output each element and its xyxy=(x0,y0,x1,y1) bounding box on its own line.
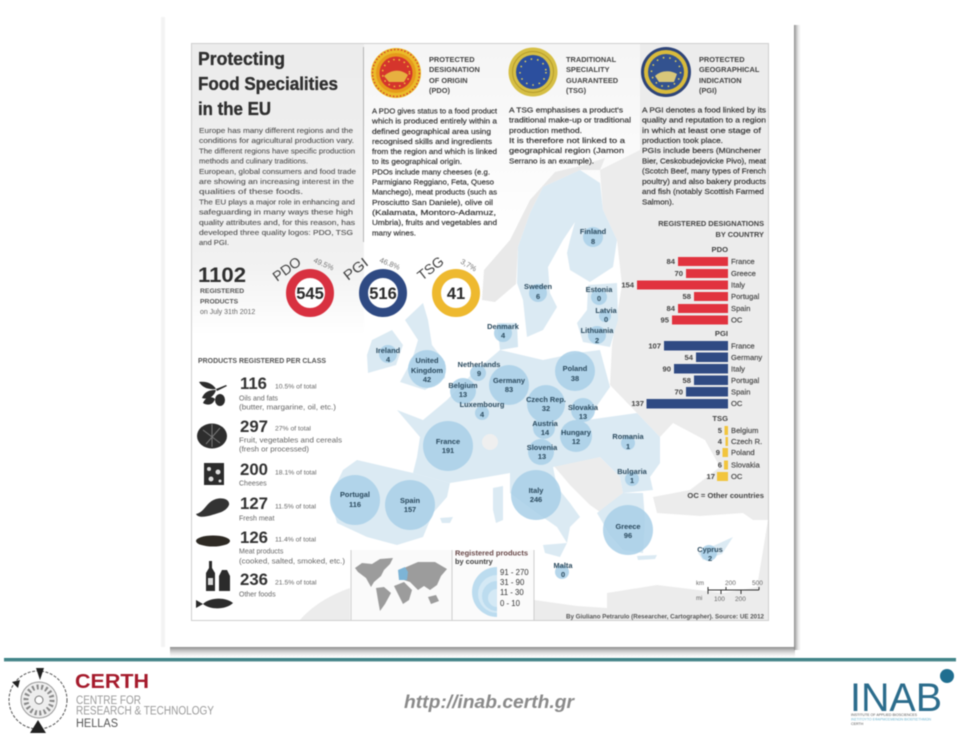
class: fruit and vegetables xyxy=(197,417,343,454)
map labels: 0 xyxy=(604,315,608,324)
panel: map background xyxy=(192,44,768,620)
bar chart: TSG: 17 xyxy=(707,472,715,481)
title xyxy=(198,49,338,119)
panel frame xyxy=(192,44,768,620)
map labels: 116 xyxy=(349,500,361,509)
icon: fruit basket xyxy=(197,424,227,448)
map labels: Belgium xyxy=(448,381,478,390)
non-EU land: Norway xyxy=(482,158,605,302)
EU land: Sweden and Finland xyxy=(517,170,617,337)
map labels: 191 xyxy=(442,446,454,455)
bar chart: PGI: Portugal xyxy=(731,376,760,385)
bar chart: TSG: Belgium xyxy=(731,426,758,435)
title: Protecting xyxy=(198,49,285,69)
bar chart: PGI: 70 xyxy=(675,388,683,396)
class: other foods: 21.5% of total xyxy=(275,580,317,586)
class: fresh meat xyxy=(196,494,317,522)
logo: CERTH emblem xyxy=(9,668,67,733)
map labels: 8 xyxy=(591,237,595,246)
class: other foods: 236 xyxy=(240,570,268,589)
donut: PGI: 46.8% xyxy=(378,256,402,272)
map labels: Czech Rep. xyxy=(526,395,566,404)
TSG text: traditional make-up or traditional xyxy=(509,116,631,124)
bar chart: TSG: TSG xyxy=(712,414,728,423)
PDO text xyxy=(371,106,498,238)
class: cheeses: 18.1% of total xyxy=(275,470,317,476)
class: cheeses: Cheeses xyxy=(239,480,267,488)
donut: TSG xyxy=(414,253,479,312)
logo: INAB: CERTH xyxy=(851,722,864,726)
heading: PDO xyxy=(429,55,480,95)
bar chart: PDO: OC xyxy=(731,316,743,324)
map labels: 4 xyxy=(501,331,506,340)
bar chart: TSG: Czech R. xyxy=(731,437,762,446)
bar chart: TSG: 9 xyxy=(716,448,720,457)
TSG text: Serrano is an example). xyxy=(509,156,594,166)
TSG text: production method. xyxy=(509,126,582,135)
class: meat products: 11.4% of total xyxy=(275,536,317,544)
donut: PGI xyxy=(340,254,402,312)
map bubbles xyxy=(330,227,717,579)
inset separators xyxy=(351,550,534,620)
CERTH wordmark: RESEARCH & TECHNOLOGY xyxy=(76,706,214,718)
CERTH wordmark: CERTH xyxy=(75,671,149,693)
logo: PDO xyxy=(371,48,421,98)
intro text xyxy=(199,126,356,247)
credit: By Giuliano Petrarulo (Researcher, Cartographer). Source: UE 2012 xyxy=(566,614,764,620)
icon: sausage xyxy=(196,536,230,546)
PDO text: Umbria), fruits and vegetables and xyxy=(372,218,497,227)
PGI text: production took place. xyxy=(642,136,723,145)
map labels: 32 xyxy=(542,404,550,413)
intro text: The EU plays a major role in enhancing and xyxy=(199,198,355,206)
map labels: 0 xyxy=(561,570,565,579)
TSG text: geographical region (Jamon xyxy=(509,146,624,155)
bar chart: TSG: Poland xyxy=(731,448,755,457)
EU land: Iberia xyxy=(330,460,450,545)
title: Food Specialities xyxy=(198,74,338,94)
total registered products xyxy=(198,264,255,316)
PDO text: Manchego), meat products (such as xyxy=(372,188,497,196)
bar chart: PDO: 84 xyxy=(667,257,676,266)
intro text: conditions for agricultural production vary. xyxy=(199,136,354,145)
PGI text: PGIs include beers (Münchener xyxy=(642,146,762,155)
intro text: qualities of these foods. xyxy=(199,187,303,196)
TSG text: A TSG emphasises a product's xyxy=(509,106,623,114)
map labels: 38 xyxy=(571,374,579,383)
icon: cheese block xyxy=(204,463,224,485)
heading: PGI xyxy=(699,55,760,95)
icon: bottles and fish xyxy=(196,561,233,608)
heading: TSG: (TSG) xyxy=(566,86,587,95)
bar chart: PDO xyxy=(621,245,760,324)
PDO text: to its geographical origin. xyxy=(372,157,462,166)
logo: INAB xyxy=(850,669,954,726)
map labels: Latvia xyxy=(595,306,618,315)
total registered products: on July 31th 2012 xyxy=(200,309,255,316)
heading: TSG xyxy=(566,55,619,95)
map labels: 12 xyxy=(572,437,580,446)
inset: legend: Registered products xyxy=(455,548,528,558)
TSG text xyxy=(509,106,631,166)
map labels: France xyxy=(436,437,460,446)
class: fruit and vegetables: (fresh or processed) xyxy=(239,446,309,454)
products per class heading: PRODUCTS REGISTERED PER CLASS xyxy=(198,356,326,365)
bar chart: PGI: 107 xyxy=(648,342,661,350)
donut: PDO: 545 xyxy=(296,285,324,303)
class: cheeses: 200 xyxy=(240,460,268,479)
map labels: Romania xyxy=(612,432,644,441)
PDO text: PDOs include many cheeses (e.g. xyxy=(372,168,490,176)
bar chart: PGI: France xyxy=(731,342,755,350)
map labels: 6 xyxy=(536,292,540,301)
map labels: 4 xyxy=(480,410,485,419)
map labels: 96 xyxy=(624,531,632,540)
map labels: 0 xyxy=(597,294,601,303)
logo: INAB: ΙΝΣΤΙΤΟΥΤΟ ΕΦΑΡΜΟΣΜΕΝΩΝ ΒΙΟΕΠΙΣΤΗΜΩΝ xyxy=(851,718,931,722)
heading: TSG: GUARANTEED xyxy=(566,76,619,85)
class: oils and fats: Oils and fats xyxy=(239,396,278,402)
class: other foods xyxy=(196,561,317,608)
map labels: 4 xyxy=(386,355,391,364)
chart heading: BY COUNTRY xyxy=(716,230,764,239)
map labels: Sweden xyxy=(524,282,552,291)
PDO text: recognised skills and ingredients xyxy=(372,137,492,146)
icon: olive branch xyxy=(199,382,227,406)
inset: legend xyxy=(452,548,534,620)
class: cheeses xyxy=(204,460,317,488)
map labels xyxy=(340,227,723,579)
PGI text: in which at least one stage of xyxy=(642,126,762,135)
top-centre tint xyxy=(364,44,644,234)
chart note: OC = Other countries xyxy=(687,491,764,500)
map labels: Cyprus xyxy=(697,545,723,554)
map labels: Spain xyxy=(400,496,421,505)
PDO text: which is produced entirely within a xyxy=(371,116,498,126)
class: meat products: Meat products xyxy=(239,548,284,556)
heading: PDO: PROTECTED xyxy=(429,55,475,64)
bar chart: PGI: 137 xyxy=(631,399,644,408)
non-EU land: Russia and east xyxy=(600,44,768,520)
bar chart: PGI: 58 xyxy=(683,376,691,385)
class: fruit and vegetables: 27% of total xyxy=(275,426,311,432)
intro text: and PGI. xyxy=(199,238,229,247)
map labels: Kingdom xyxy=(411,366,443,375)
map labels: 9 xyxy=(477,369,481,378)
EU land: Denmark xyxy=(497,323,518,350)
heading: PDO: (PDO) xyxy=(429,86,450,95)
footer rule xyxy=(4,658,956,662)
CERTH wordmark xyxy=(75,671,214,730)
bar chart: PDO: Portugal xyxy=(731,292,760,301)
PGI text: poultry) and also bakery products xyxy=(642,177,766,186)
intro text: are showing an increasing interest in the xyxy=(199,177,354,186)
TSG text: It is therefore not linked to a xyxy=(509,136,626,145)
bar chart: PDO: 95 xyxy=(661,316,670,324)
map labels: 13 xyxy=(459,390,467,399)
bar chart: PDO: Italy xyxy=(731,280,745,290)
intro text: The different regions have specific production xyxy=(199,146,355,156)
EU land: United Kingdom xyxy=(400,303,445,390)
heading: PGI: PROTECTED xyxy=(699,55,745,64)
bar chart: PGI xyxy=(631,329,762,408)
total registered products: 1102 xyxy=(198,264,246,287)
scale bar xyxy=(696,580,763,603)
map labels: Lithuania xyxy=(581,326,614,335)
bar chart: PGI: OC xyxy=(731,399,743,408)
CERTH wordmark: HELLAS xyxy=(76,718,118,730)
map labels: Italy xyxy=(529,486,544,495)
heading: PDO: OF ORIGIN xyxy=(429,76,468,85)
map labels: Luxembourg xyxy=(460,400,505,409)
logo: TSG xyxy=(508,48,558,96)
donut: TSG: TSG xyxy=(414,253,447,283)
bar chart: TSG: 5 xyxy=(718,426,723,435)
class: fruit and vegetables: Fruit, vegetables and cereals xyxy=(239,438,343,444)
donut: PGI: PGI xyxy=(340,254,371,283)
inset: legend: 91 - 270 xyxy=(500,568,529,577)
map labels: 13 xyxy=(538,452,546,461)
scale bar: 200 xyxy=(735,596,746,603)
heading: TSG: TRADITIONAL xyxy=(566,55,617,64)
map labels: 157 xyxy=(404,505,416,514)
map labels: Greece xyxy=(615,522,641,531)
intro text: Europe has many different regions and the xyxy=(199,126,353,135)
donut: PGI: 516 xyxy=(369,285,397,303)
map labels: 246 xyxy=(530,495,542,504)
bar chart: PGI: Germany xyxy=(731,353,762,362)
title: in the EU xyxy=(198,99,271,119)
map labels: 2 xyxy=(595,336,599,345)
class: other foods: Other foods xyxy=(239,592,276,598)
bar chart: PGI: Italy xyxy=(731,364,745,374)
poster paper xyxy=(165,17,794,647)
map labels: Bulgaria xyxy=(617,467,648,476)
map labels: Denmark xyxy=(487,322,520,331)
map labels: Germany xyxy=(493,376,526,385)
bar chart: PGI: 90 xyxy=(663,364,671,374)
PDO text: A PDO gives status to a food product xyxy=(372,106,498,116)
bar chart: TSG xyxy=(707,414,762,481)
heading: PGI: GEOGRAPHICAL xyxy=(699,65,760,74)
logo: PGI xyxy=(641,47,691,97)
intro text: developed three quality logos: PDO, TSG xyxy=(199,228,353,237)
CERTH wordmark: CENTRE FOR xyxy=(76,695,141,707)
intro text: European, global consumers and food trade xyxy=(199,167,356,176)
class: oils and fats: 10.5% of total xyxy=(275,384,317,390)
bar chart: PGI: 54 xyxy=(685,353,694,362)
PDO text: Parmigiano Reggiano, Feta, Queso xyxy=(372,178,494,186)
heading: TSG: SPECIALITY xyxy=(566,65,610,74)
chart heading xyxy=(658,219,764,239)
bar chart: PDO: 84 xyxy=(667,304,676,313)
class: meat products: (cooked, salted, smoked, etc.) xyxy=(239,558,345,566)
EU land: Baltics xyxy=(577,283,618,347)
class: meat products: 126 xyxy=(240,528,268,547)
PGI text: (Scotch Beef, many types of French xyxy=(642,166,766,176)
donut: TSG: 3,7% xyxy=(459,257,479,273)
scale bar: mi xyxy=(696,596,702,602)
PDO text: defined geographical area using xyxy=(372,127,491,136)
bar chart: PGI: PGI xyxy=(715,329,728,338)
PDO text: from the region and which is linked xyxy=(372,147,497,156)
map labels: United xyxy=(416,356,439,365)
heading: PDO: DESIGNATION xyxy=(429,65,480,74)
bar chart: PDO: Spain xyxy=(731,304,750,313)
PGI text: and fish (notably Scottish Farmed xyxy=(642,187,764,196)
donut: PDO: 49.5% xyxy=(312,256,336,273)
inset: legend: 11 - 30 xyxy=(500,588,524,597)
icon: steak xyxy=(196,498,229,517)
total registered products: PRODUCTS xyxy=(200,298,239,306)
class: oils and fats: 116 xyxy=(240,374,267,393)
heading: PGI: INDICATION xyxy=(699,76,742,85)
inset: legend: by country xyxy=(455,557,494,566)
logo: INAB: INSTITUTE OF APPLIED BIOSCIENCES xyxy=(851,713,918,717)
class: meat products xyxy=(196,528,345,566)
intro text: quality attributes and, for this reason, has xyxy=(199,218,355,227)
PGI text xyxy=(642,106,767,206)
map labels: 14 xyxy=(541,428,550,437)
PGI text: A PGI denotes a food linked by its xyxy=(642,106,766,114)
bar chart: PDO: PDO xyxy=(712,245,728,254)
map labels: Portugal xyxy=(340,490,370,499)
PDO text: many wines. xyxy=(372,228,416,238)
intro text: safeguarding in many ways these high xyxy=(199,208,353,216)
map labels: Malta xyxy=(554,561,573,570)
total registered products: REGISTERED xyxy=(200,288,244,295)
map labels: 1 xyxy=(626,442,630,451)
bar chart: TSG: Slovakia xyxy=(731,460,760,470)
bar chart: PGI: Spain xyxy=(731,388,750,396)
map labels: 42 xyxy=(423,375,431,384)
class: fresh meat: Fresh meat xyxy=(239,516,274,522)
scale bar: 500 xyxy=(752,580,763,587)
heading: PGI: (PGI) xyxy=(699,86,717,95)
bar chart: PDO: 70 xyxy=(675,269,683,278)
map labels: 83 xyxy=(505,385,513,394)
map labels: Estonia xyxy=(586,285,613,294)
class: fresh meat: 127 xyxy=(240,494,268,513)
divider xyxy=(363,47,364,242)
map labels: 2 xyxy=(708,554,712,563)
map labels: Slovenia xyxy=(527,443,558,452)
inset: legend: 0 - 10 xyxy=(500,599,521,608)
PGI text: Salmon). xyxy=(642,198,674,206)
map labels: Finland xyxy=(580,227,607,236)
top-left panel tint xyxy=(192,44,364,334)
chart heading: REGISTERED DESIGNATIONS xyxy=(658,219,764,228)
non-EU land: Balkans xyxy=(553,457,623,512)
class: fruit and vegetables: 297 xyxy=(240,417,268,436)
footer URL: http://inab.certh.gr xyxy=(404,691,576,712)
scale bar: km xyxy=(696,581,704,587)
map labels: Netherlands xyxy=(458,360,500,369)
map labels: Poland xyxy=(563,364,588,373)
PGI text: quality and reputation to a region xyxy=(642,116,766,124)
bar chart: TSG: 4 xyxy=(718,437,723,446)
donut: PDO xyxy=(269,253,336,312)
inset: world map xyxy=(351,550,452,620)
PDO text: Prosciutto San Daniele), olive oil xyxy=(372,198,493,207)
EU land: islands xyxy=(440,486,733,560)
bar chart: PDO: France xyxy=(731,257,755,266)
logo: INAB: INAB xyxy=(850,676,942,720)
map labels: 1 xyxy=(630,476,634,485)
scale bar: 100 xyxy=(714,596,725,603)
map labels: Ireland xyxy=(376,346,401,355)
non-EU land: Africa xyxy=(300,520,768,620)
bar chart: PDO: Greece xyxy=(731,269,756,278)
PDO text: (Kalamata, Montoro-Adamuz, xyxy=(372,208,496,217)
EU land: Greece xyxy=(597,493,645,553)
bar chart: TSG: OC xyxy=(731,472,743,481)
bar chart: PDO: 154 xyxy=(621,280,635,290)
map labels: 13 xyxy=(579,412,587,421)
donut: PDO: PDO xyxy=(269,253,304,284)
map labels: Slovakia xyxy=(568,403,599,412)
poster paper shadow xyxy=(161,17,801,658)
EU land: Ireland xyxy=(367,330,403,373)
donut: TSG: 41 xyxy=(447,285,465,303)
intro text: methods and culinary traditions. xyxy=(199,156,308,166)
EU land: mainland xyxy=(397,350,660,543)
inset: legend: 31 - 90 xyxy=(500,578,525,587)
PGI text: Bier, Ceskobudejovicke Pivo), meat xyxy=(642,156,767,166)
bar chart: PDO: 58 xyxy=(683,292,691,301)
scale bar: 200 xyxy=(725,580,736,587)
Switzerland xyxy=(482,434,498,450)
class: oils and fats: (butter, margarine, oil, etc.) xyxy=(239,404,336,412)
class: oils and fats xyxy=(199,374,336,412)
class: fresh meat: 11.5% of total xyxy=(275,504,317,510)
map labels: Austria xyxy=(532,419,559,428)
map labels: Hungary xyxy=(561,428,592,437)
bar chart: TSG: 6 xyxy=(718,460,722,470)
